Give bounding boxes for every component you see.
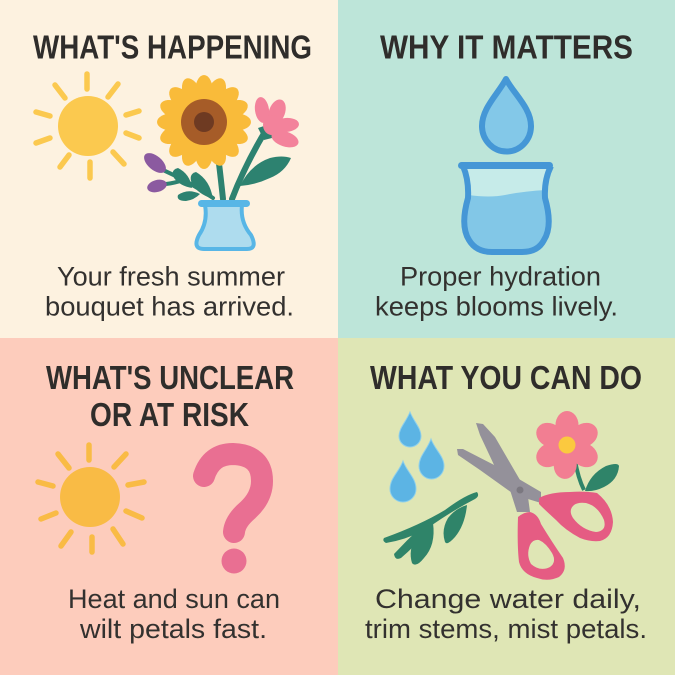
heading: why it matters: WHY IT MATTERS [380,28,633,66]
icon: question mark [204,454,262,574]
pink flower [253,96,301,150]
icon: sun [36,74,139,178]
body text: keeps blooms lively. [375,292,618,322]
heading: what's unclear or at risk [46,359,294,433]
body text [375,262,618,322]
icon: glass of water [458,162,553,252]
body text [45,262,294,322]
heading: what's unclear or at risk: OR AT RISK [90,396,249,433]
panel: what's unclear or at risk [0,338,338,675]
body text [365,584,647,644]
panel: what's happening [0,0,338,338]
body text: Heat and sun can [68,584,280,614]
icon: water drop [482,79,531,152]
icon: sun [38,445,144,552]
body text: wilt petals fast. [79,614,267,644]
body text [68,584,280,644]
body text: bouquet has arrived. [45,292,294,322]
icon: bouquet in vase [141,75,301,249]
body text: Proper hydration [400,262,601,292]
body text: Change water daily, [375,584,641,614]
icon: pink flower [532,411,619,491]
heading: what's unclear or at risk: WHAT'S UNCLEAR [46,359,294,396]
icon: water drops [390,412,444,502]
icon: scissors [457,423,613,580]
body text: Your fresh summer [57,262,285,292]
body text: trim stems, mist petals. [365,614,647,644]
panel: why it matters [338,0,675,338]
heading: what's happening: WHAT'S HAPPENING [33,28,312,66]
sunflower [157,75,251,169]
vase [196,205,254,249]
panel: what you can do [338,338,675,675]
icon: green sprig [383,492,478,565]
